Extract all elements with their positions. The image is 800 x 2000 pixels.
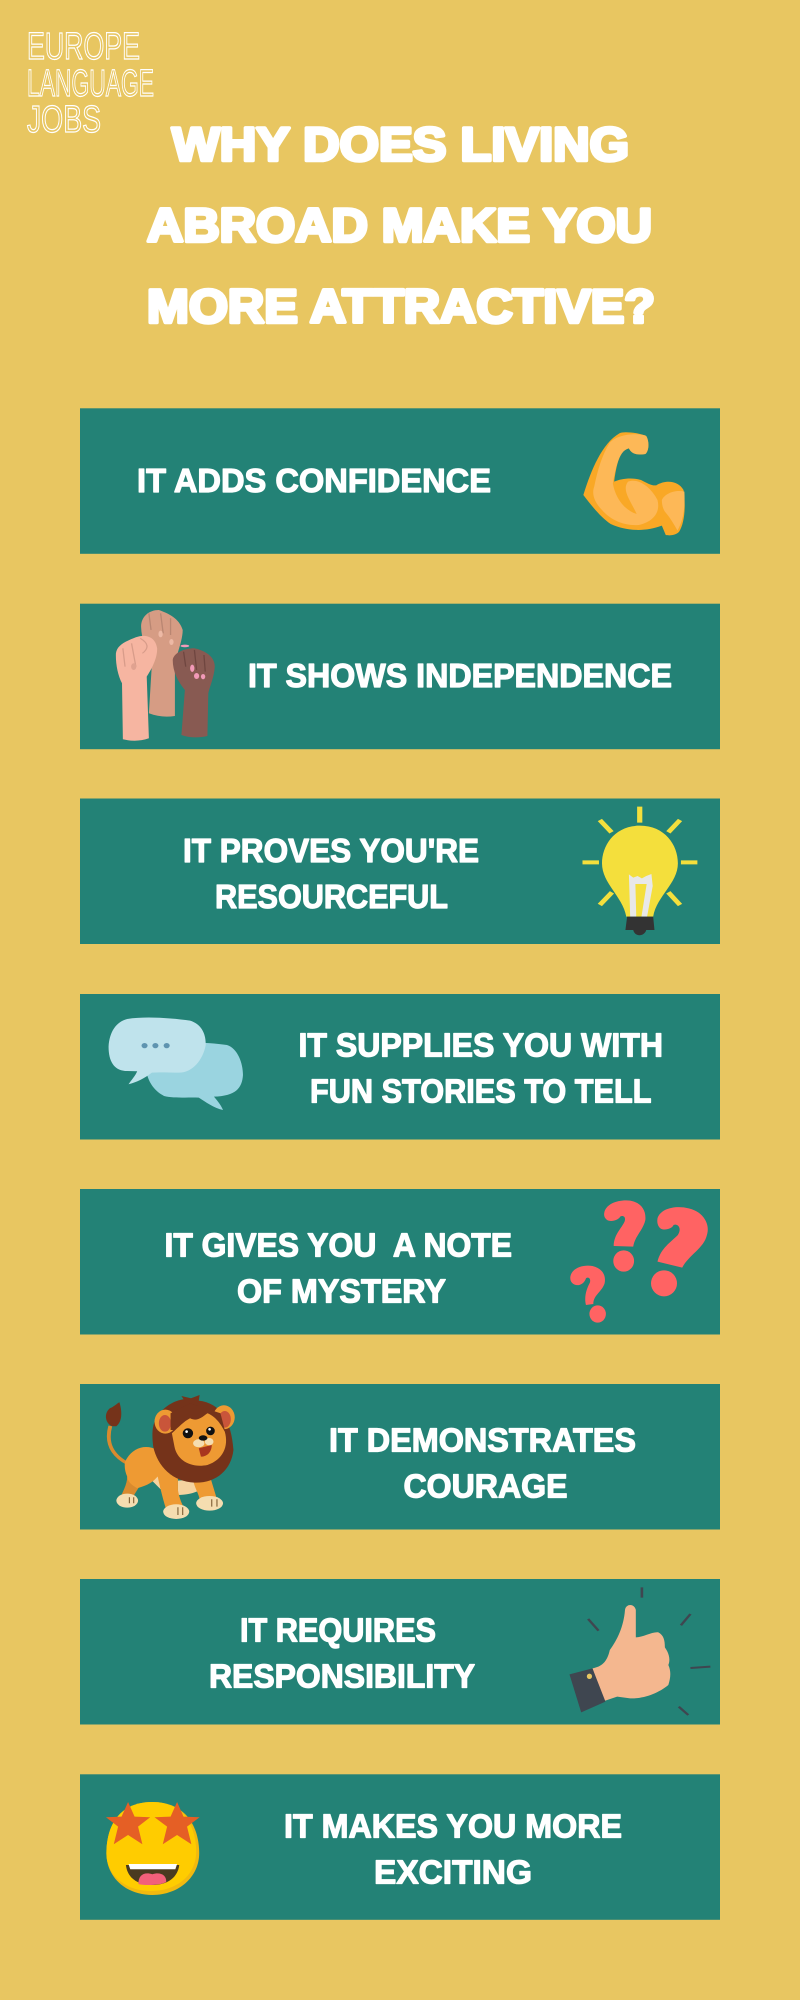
- text: it demonstrates courage: [329, 1422, 636, 1505]
- text: it adds confidence: IT ADDS CONFIDENCE: [137, 462, 491, 499]
- panel: it makes you more exciting: [80, 1774, 720, 1920]
- icon: question marks: [570, 1200, 708, 1323]
- text: it demonstrates courage: IT DEMONSTRATES: [329, 1422, 636, 1459]
- text: it gives you a note of mystery: OF MYSTERY: [237, 1273, 446, 1310]
- icon: flexed arm: [583, 432, 685, 535]
- text: it demonstrates courage: COURAGE: [404, 1468, 568, 1505]
- title: [147, 118, 655, 332]
- icon: lion: [106, 1395, 235, 1519]
- title: WHY DOES LIVING: [172, 118, 629, 170]
- panel: it gives you a note of mystery: [80, 1189, 720, 1334]
- logo: Europe Language Jobs: EUROPE: [27, 26, 140, 68]
- panel: it supplies you with fun stories to tell: [80, 994, 720, 1140]
- icon: star-eyed emoji: [106, 1802, 200, 1895]
- text: it proves you're resourceful: [183, 832, 479, 915]
- logo: Europe Language Jobs: [27, 26, 154, 141]
- panel: it shows independence: [80, 604, 720, 749]
- icon: speech bubbles: [109, 1018, 243, 1110]
- text: it supplies you with fun stories to tell: [298, 1027, 663, 1110]
- text: it proves you're resourceful: IT PROVES YOU'RE: [183, 832, 479, 869]
- icon: thumbs up: [569, 1587, 710, 1715]
- text: it makes you more exciting: EXCITING: [374, 1854, 532, 1891]
- icon: raised fists: [116, 610, 215, 741]
- text: it requires responsibility: IT REQUIRES: [240, 1612, 436, 1649]
- panel: it requires responsibility: [80, 1579, 720, 1724]
- text: it requires responsibility: RESPONSIBILITY: [209, 1658, 475, 1695]
- text: it supplies you with fun stories to tell: FUN STORIES TO TELL: [310, 1073, 652, 1110]
- text: it gives you a note of mystery: [164, 1227, 512, 1310]
- text: it makes you more exciting: [284, 1808, 622, 1891]
- text: it supplies you with fun stories to tell: IT SUPPLIES YOU WITH: [298, 1027, 663, 1064]
- panel: it adds confidence: [80, 408, 720, 554]
- text: it gives you a note of mystery: IT GIVES YOU A NOTE: [164, 1227, 512, 1264]
- text: it requires responsibility: [209, 1612, 475, 1695]
- logo: Europe Language Jobs: JOBS: [27, 99, 101, 141]
- logo: Europe Language Jobs: LANGUAGE: [27, 63, 154, 105]
- text: it proves you're resourceful: RESOURCEFUL: [215, 878, 448, 915]
- title: ABROAD MAKE YOU: [147, 198, 652, 252]
- panel: it proves you're resourceful: [80, 798, 720, 944]
- icon: light bulb: [582, 807, 697, 935]
- title: MORE ATTRACTIVE?: [147, 280, 655, 332]
- text: it makes you more exciting: IT MAKES YOU MORE: [284, 1808, 622, 1845]
- text: it shows independence: IT SHOWS INDEPENDENCE: [248, 657, 672, 694]
- panel: it demonstrates courage: [80, 1384, 720, 1530]
